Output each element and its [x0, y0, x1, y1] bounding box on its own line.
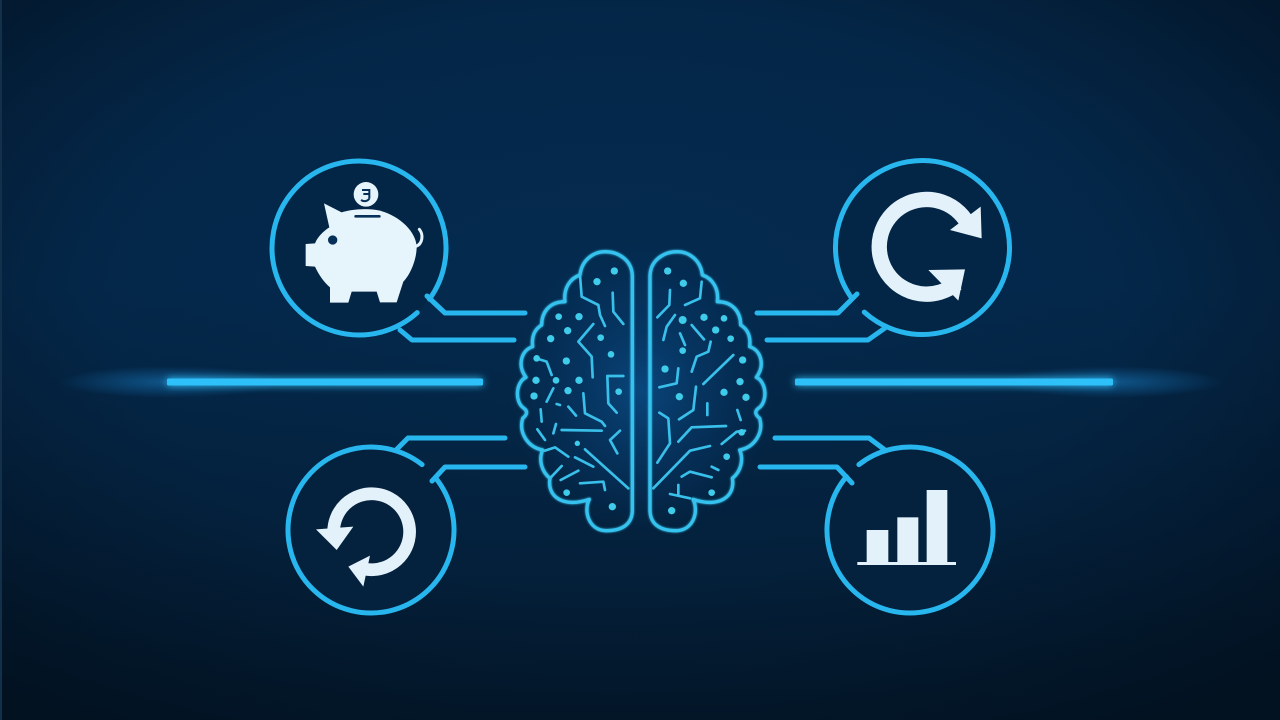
bottom-right node: bar chart — [760, 438, 993, 613]
left hemisphere outline — [517, 252, 632, 531]
bottom-left node: undo cycle — [288, 438, 525, 613]
right hemisphere outline — [650, 252, 765, 531]
right horizontal light bar — [795, 366, 1224, 398]
top-right node: refresh arrows — [757, 160, 1009, 340]
brain — [508, 243, 775, 537]
icon: piggy bank — [306, 182, 422, 303]
ring and connectors — [757, 160, 1009, 340]
left hemisphere circuits — [537, 275, 628, 490]
ring and connectors — [760, 438, 993, 613]
top-left node: piggy bank — [272, 161, 525, 340]
icon: undo cycle — [316, 494, 410, 587]
ring and connectors — [272, 161, 525, 340]
left hemisphere nodes — [530, 267, 622, 510]
ring and connectors — [288, 438, 525, 613]
icon: bar chart — [857, 490, 956, 565]
left horizontal light bar — [58, 366, 483, 398]
icon: refresh arrows — [879, 199, 982, 301]
right hemisphere circuits — [653, 282, 745, 498]
right hemisphere nodes — [661, 267, 750, 514]
